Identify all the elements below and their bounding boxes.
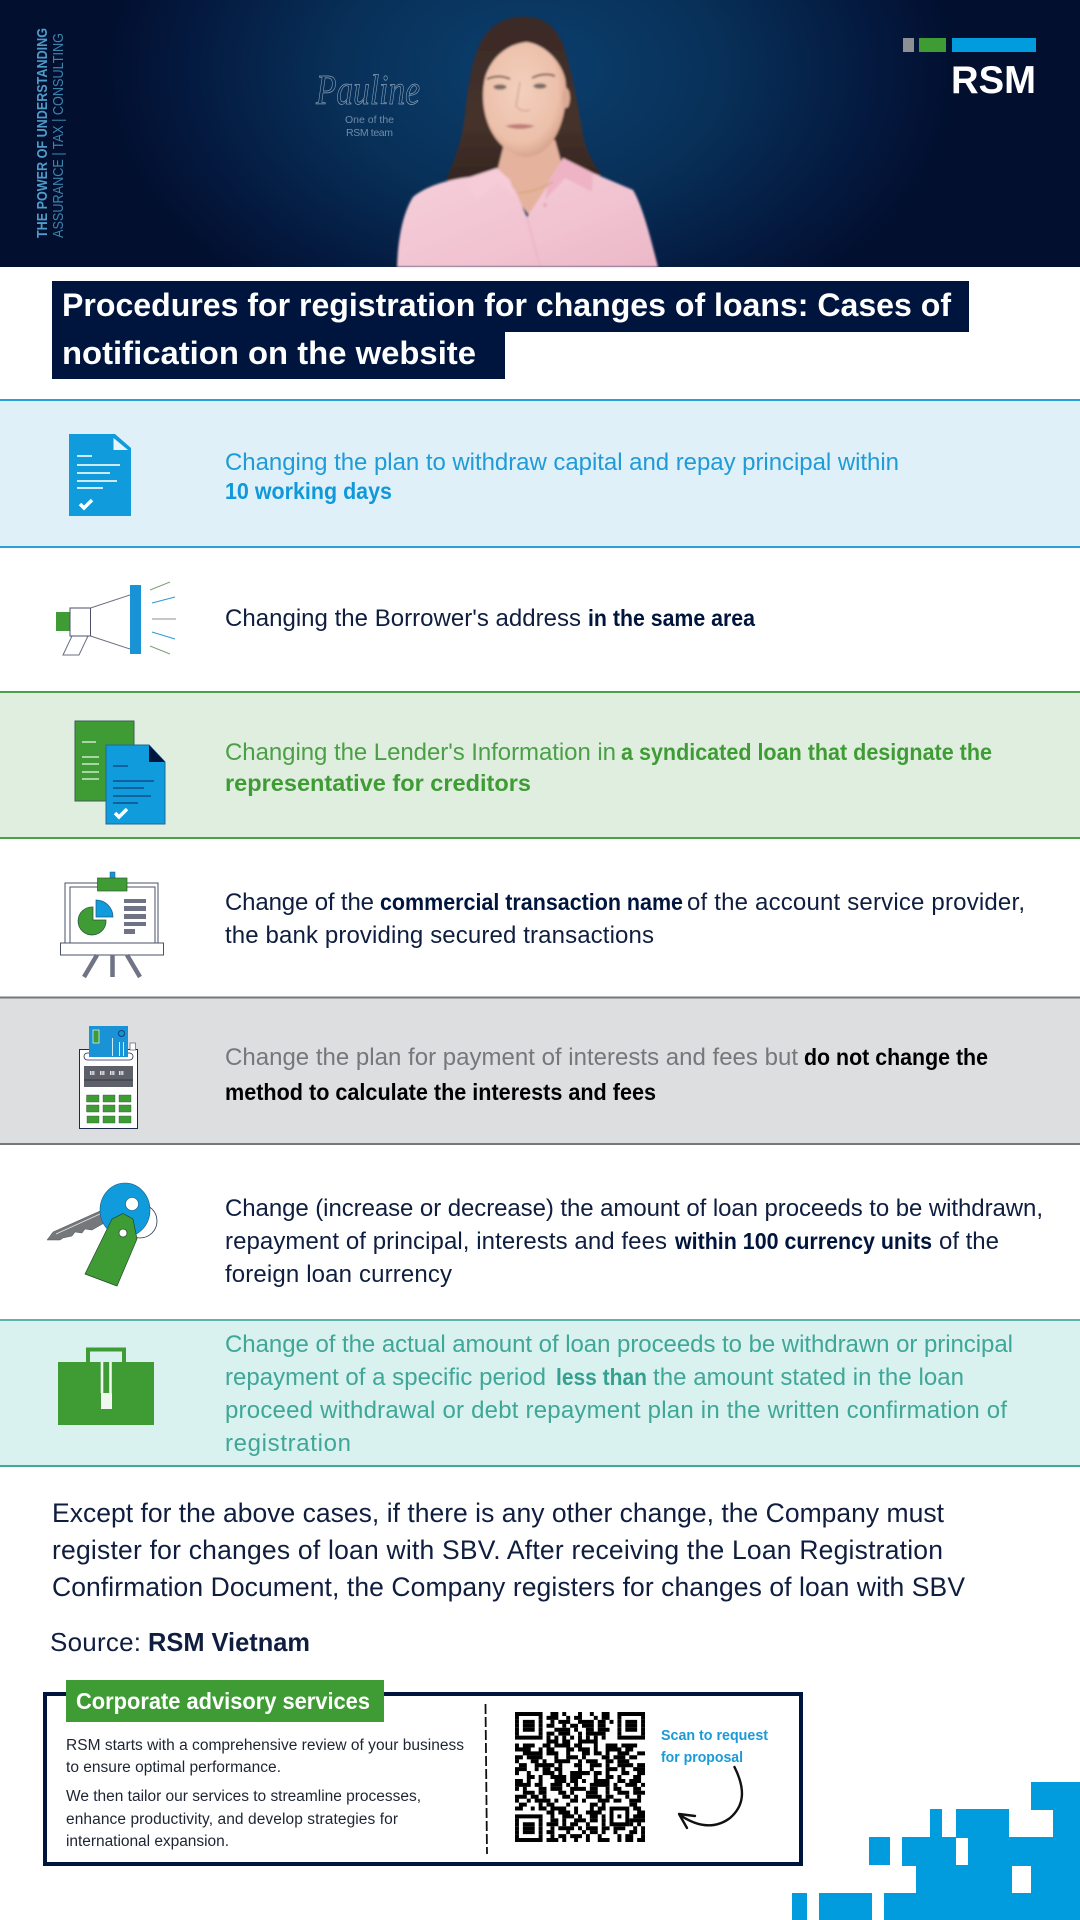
row 3 text: a syndicated loan that designate the [621,739,992,765]
source line [50,1627,310,1657]
row 1: capital plan [0,399,1080,548]
signature caption [315,68,420,139]
row 5 text: method to calculate the interests and fees [225,1079,656,1105]
icon: two documents [75,721,165,824]
card description [66,1737,464,1850]
card description: enhance productivity, and develop strategies for [66,1811,398,1828]
scan prompt: for proposal [661,1749,743,1766]
row 5 text [225,1044,988,1105]
row 7 text: Change of the actual amount of loan proceeds to be withdrawn or principal [225,1331,1013,1358]
row 3 text: representative for creditors [225,770,531,796]
signature caption: One of the [345,114,394,126]
row 6 text: within 100 currency units [674,1228,932,1254]
RSM logo: RSM [951,59,1036,102]
row 7 text: proceed withdrawal or debt repayment plan in the written confirmation of [225,1397,1007,1424]
card description: We then tailor our services to streamline processes, [66,1788,421,1805]
row 5: interest payment plan [0,996,1080,1145]
row 7 text: less than [556,1364,647,1390]
card description: RSM starts with a comprehensive review of your business [66,1737,464,1754]
signature caption: RSM team [346,127,393,139]
scan prompt [661,1727,768,1766]
row 6: loan proceeds amount [47,1183,1043,1288]
card heading: Corporate advisory services [76,1688,370,1714]
row 1 text: Changing the plan to withdraw capital and repay principal within [225,449,899,476]
source line: Source: [50,1627,141,1657]
row 1 text [225,449,899,504]
title [52,281,969,379]
row 6 text [225,1195,1043,1288]
row 7 text: registration [225,1430,351,1457]
card description: international expansion. [66,1833,229,1850]
row 4 text: the bank providing secured transactions [225,922,654,949]
title: Procedures for registration for changes of loans: Cases of [62,287,951,323]
row 3: lender information [0,691,1080,839]
header banner [0,0,1080,267]
row 4 text: commercial transaction name [380,889,683,915]
vertical tagline: ASSURANCE | TAX | CONSULTING [51,33,67,238]
row 7 text [225,1331,1013,1457]
row 5 text: do not change the [804,1044,988,1070]
icon: document with check [69,434,131,516]
card heading [66,1680,384,1722]
row 7: actual amount [0,1319,1080,1467]
row 1 text: 10 working days [225,478,392,504]
row 4 text: Change of the [225,889,374,916]
signature caption: Pauline [315,68,420,114]
closing paragraph: Except for the above cases, if there is any other change, the Company must [52,1498,945,1528]
icon: presentation board [60,872,164,977]
card description: to ensure optimal performance. [66,1759,281,1776]
row 6 text: repayment of principal, interests and fees [225,1228,667,1255]
source line: RSM Vietnam [148,1627,310,1657]
row 7 text: repayment of a specific period [225,1364,546,1391]
icon: megaphone [56,582,176,655]
QR code [515,1714,645,1840]
row 4 text: of the account service provider, [687,889,1025,916]
vertical tagline: THE POWER OF UNDERSTANDING [35,28,51,238]
scan prompt: Scan to request [661,1727,768,1744]
panel: corporate advisory card [45,1680,801,1864]
title: notification on the website [62,335,476,371]
portrait illustration [397,17,658,267]
row 2 text [225,605,756,632]
row 6 text: of the [939,1228,999,1255]
row 6 text: foreign loan currency [225,1261,452,1288]
row 2: borrower address [56,582,756,655]
row 6 text: Change (increase or decrease) the amount of loan proceeds to be withdrawn, [225,1195,1043,1222]
row 5 text: Change the plan for payment of interests and fees but [225,1044,798,1071]
icon: card terminal [80,1026,138,1128]
row 4 text [225,889,1025,949]
closing paragraph: Confirmation Document, the Company registers for changes of loan with SBV [52,1572,965,1602]
row 7 text: the amount stated in the loan [653,1364,964,1391]
icon: briefcase [58,1350,154,1425]
arrow to QR code [679,1767,742,1828]
row 3 text: Changing the Lender's Information in [225,739,616,766]
closing paragraph: register for changes of loan with SBV. After receiving the Loan Registration [52,1535,943,1565]
row 4: commercial transaction name [60,872,1025,977]
row 2 text: Changing the Borrower's address [225,605,581,632]
row 3 text [225,739,992,796]
row 2 text: in the same area [588,605,756,631]
vertical tagline [35,28,67,238]
decorative pixel blocks [792,1782,1080,1920]
icon: key with tag [47,1183,157,1286]
RSM logo [903,38,1036,102]
closing paragraph [52,1498,965,1602]
